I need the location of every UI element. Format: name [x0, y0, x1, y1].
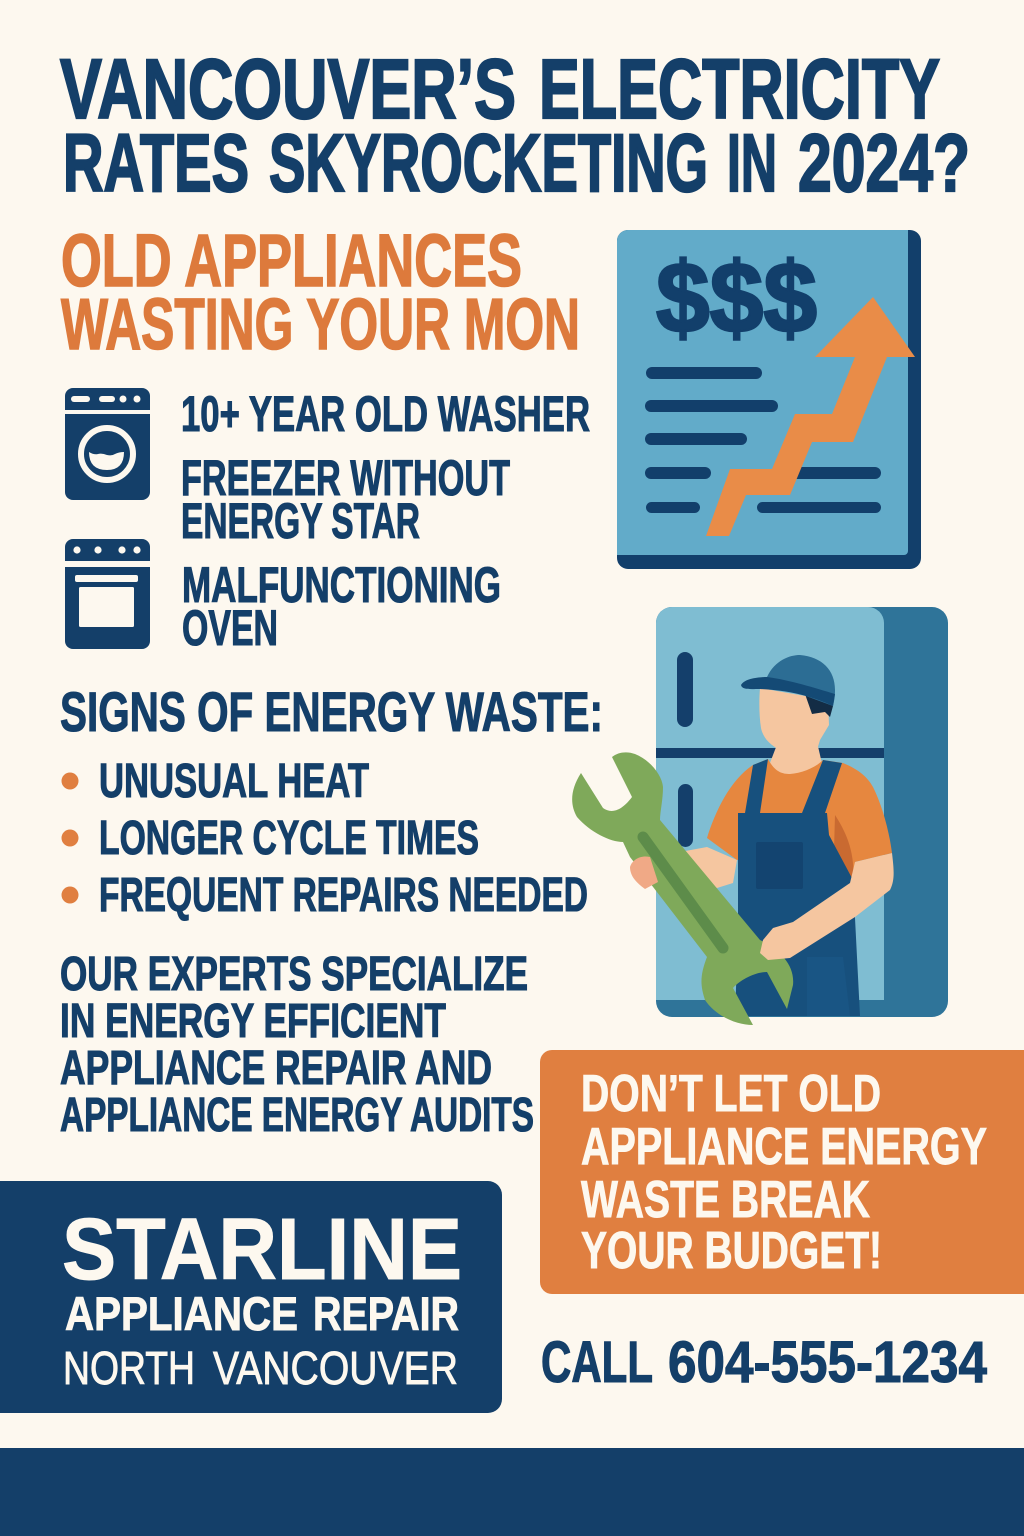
title: 2024? — [798, 118, 970, 209]
text block: experts: APPLIANCE REPAIR AND — [60, 1042, 492, 1095]
panel: company name: NORTH — [63, 1342, 195, 1394]
text block: experts — [60, 948, 534, 1142]
icon: rising bill with arrow: $$$ — [656, 242, 817, 354]
footer bar — [0, 1448, 1024, 1536]
panel: company name: APPLIANCE — [65, 1287, 298, 1340]
icon: rising bill with arrow — [617, 230, 921, 569]
title: RATES — [63, 118, 249, 209]
bullet list: signs: LONGER CYCLE TIMES — [99, 812, 479, 865]
title: VANCOUVER’S — [60, 42, 516, 136]
call to action: phone number: CALL — [541, 1330, 653, 1395]
call to action: phone number — [541, 1330, 987, 1395]
illustration: technician with fridge and wrench — [572, 607, 948, 1025]
list item: freezer: ENERGY STAR — [181, 493, 420, 549]
callout: orange warning box: WASTE BREAK — [581, 1171, 870, 1229]
list item: oven — [182, 557, 501, 656]
subtitle: old appliances — [61, 219, 580, 365]
panel: company name: VANCOUVER — [213, 1342, 458, 1394]
text block: experts: OUR EXPERTS SPECIALIZE — [60, 948, 528, 1001]
callout: orange warning box — [540, 1050, 1024, 1294]
text block: experts: IN ENERGY EFFICIENT — [60, 995, 446, 1048]
text block: experts: APPLIANCE ENERGY AUDITS — [60, 1089, 534, 1142]
title: IN — [727, 118, 777, 209]
list item: freezer: FREEZER WITHOUT — [181, 450, 510, 506]
list item: washer: 10+ YEAR OLD WASHER — [181, 386, 590, 442]
callout: orange warning box: DON’T LET OLD — [581, 1065, 881, 1123]
subtitle: old appliances: OLD APPLIANCES — [61, 219, 522, 302]
bullet list: signs — [62, 755, 588, 922]
subtitle: old appliances: WASTING YOUR MON — [61, 285, 580, 365]
panel: company name — [0, 1181, 502, 1413]
bullet list: signs: FREQUENT REPAIRS NEEDED — [99, 869, 588, 922]
title — [60, 42, 970, 209]
callout: orange warning box: YOUR BUDGET! — [581, 1222, 882, 1280]
icon: oven — [65, 539, 150, 649]
list item: freezer — [181, 450, 510, 549]
title: SKYROCKETING — [269, 118, 708, 209]
list item: oven: OVEN — [182, 600, 278, 656]
bullet list: signs: UNUSUAL HEAT — [99, 755, 369, 808]
panel: company name: REPAIR — [313, 1287, 459, 1340]
list item: oven: MALFUNCTIONING — [182, 557, 501, 613]
heading: signs of energy waste: SIGNS OF ENERGY WASTE: — [60, 680, 603, 743]
icon: washer — [65, 388, 150, 500]
call to action: phone number: 604-555-1234 — [668, 1330, 987, 1395]
panel: company name: STARLINE — [62, 1201, 462, 1298]
